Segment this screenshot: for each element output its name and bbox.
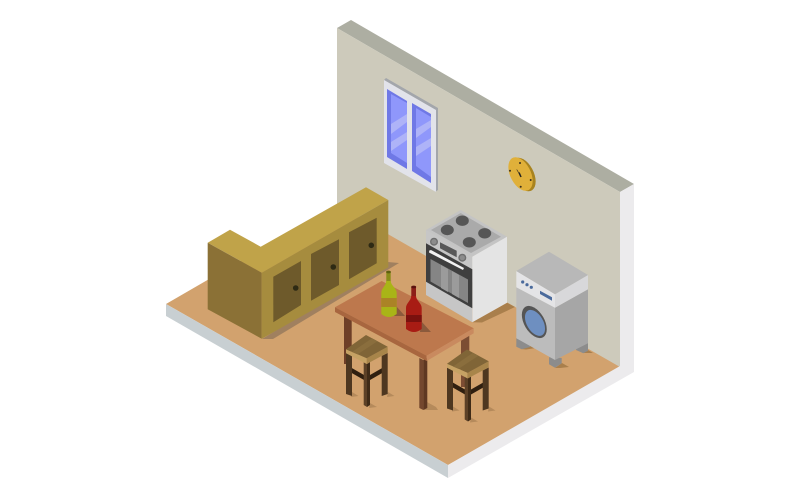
sideboard cabinet — [208, 187, 388, 339]
cabinet shadow — [262, 262, 399, 339]
wall clock — [508, 152, 536, 197]
burners — [441, 216, 491, 248]
control dials and display — [430, 238, 466, 262]
back wall — [337, 20, 634, 370]
washing machine shadows — [521, 344, 593, 368]
green bottle — [381, 271, 405, 317]
stove shadow — [472, 303, 515, 322]
floor — [166, 184, 634, 478]
porthole door — [522, 300, 547, 344]
control buttons — [521, 280, 552, 301]
stove — [426, 210, 507, 322]
window — [384, 78, 438, 192]
table back and left legs — [344, 314, 469, 387]
table leg shadow — [424, 402, 438, 410]
oven door — [426, 243, 472, 308]
table top — [335, 281, 474, 361]
cabinet door 2 — [311, 239, 339, 301]
table front leg — [419, 358, 427, 410]
right stool — [447, 350, 496, 422]
cabinet door 3 — [349, 218, 377, 279]
washing machine — [516, 252, 588, 368]
left stool — [346, 335, 394, 408]
feet — [516, 338, 588, 368]
cabinet door 1 — [273, 261, 301, 322]
red bottle — [406, 286, 431, 332]
